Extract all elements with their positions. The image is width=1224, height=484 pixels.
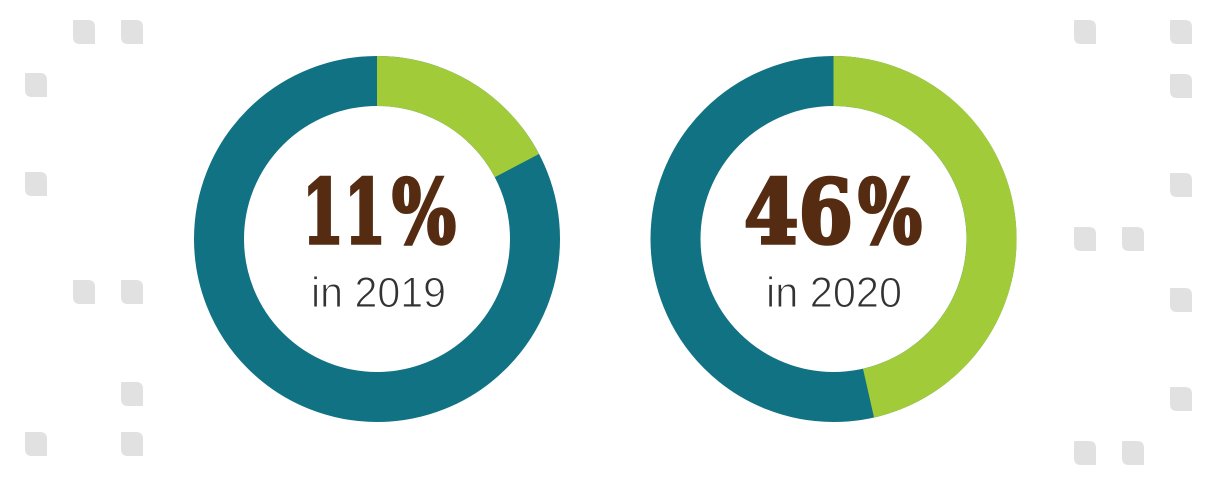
big number: 46%: 46 (744, 160, 853, 264)
donut chart: 2020 (676, 81, 992, 397)
label: in 2020: in 2020 (766, 269, 902, 317)
label: in 2019: in 2019 (311, 269, 446, 317)
big number: 46%: % (858, 160, 922, 264)
big number: 11%: 11 (302, 160, 386, 264)
donut chart: 2019 (219, 81, 535, 397)
background squares: right cluster (1074, 20, 1192, 465)
big number: 11%: % (392, 160, 456, 264)
background squares: left cluster (25, 20, 143, 456)
